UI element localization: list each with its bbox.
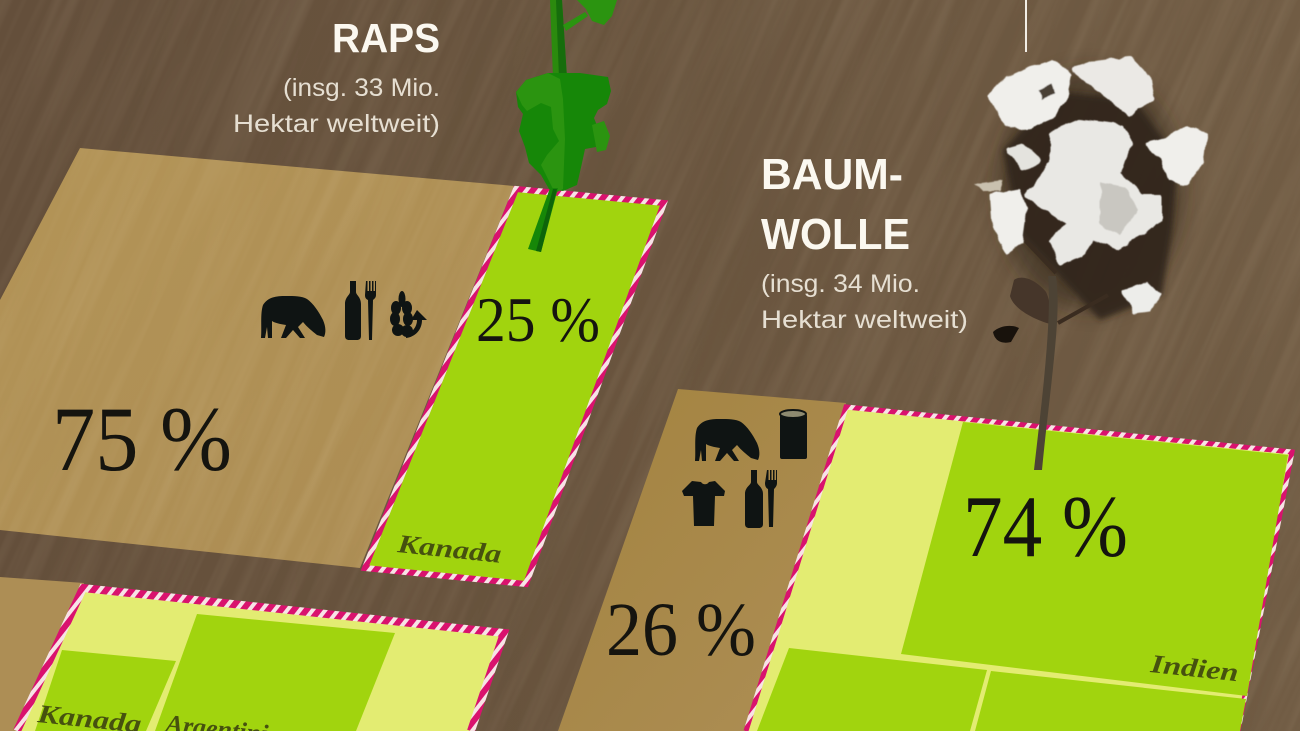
panel: Raps GM share Kanada bbox=[365, 189, 664, 584]
text: Baumwolle area: (insg. 34 Mio. bbox=[761, 270, 920, 298]
panel: Baumwolle conventional share bbox=[558, 389, 846, 731]
line: callout leader bbox=[1025, 0, 1027, 52]
panel: lower left conventional plot bbox=[0, 577, 84, 731]
area: lower country 1 bbox=[757, 648, 987, 731]
panel: Raps conventional share bbox=[0, 148, 514, 568]
icon: wheat and recycling arrow bbox=[390, 291, 427, 338]
text: Raps area: Hektar weltweit) bbox=[233, 110, 440, 138]
icon: cow bbox=[695, 419, 759, 461]
icon: cotton plant bbox=[974, 58, 1205, 470]
icon: t-shirt bbox=[682, 481, 725, 526]
heading: Raps: RAPS bbox=[332, 15, 440, 61]
heading: Baumwolle: BAUM- bbox=[761, 150, 903, 199]
text: Raps area: (insg. 33 Mio. bbox=[283, 74, 440, 102]
area: Kanada bbox=[35, 650, 176, 731]
percentage 75: 75 % bbox=[52, 388, 232, 490]
stem bbox=[1034, 276, 1058, 470]
label: Kanada: Kanada bbox=[395, 529, 503, 569]
label: Indien: Indien bbox=[1148, 649, 1240, 687]
icon: rapeseed plant bbox=[516, 0, 617, 252]
percentage 74: 74 % bbox=[963, 479, 1128, 576]
area: Indien bbox=[901, 422, 1288, 696]
panel: lower left GM plot bbox=[17, 588, 504, 731]
cotton bolls bbox=[974, 58, 1205, 312]
icon: can bbox=[780, 410, 807, 459]
heading: Baumwolle: WOLLE bbox=[761, 210, 910, 259]
leaf bbox=[1010, 278, 1051, 324]
icon: cow bbox=[261, 296, 325, 338]
area: Argentinien bbox=[155, 614, 395, 731]
icon: bottle bbox=[745, 470, 763, 528]
icon: oil bottle bbox=[345, 281, 361, 340]
icon: fork bbox=[765, 470, 777, 527]
percentage 26: 26 % bbox=[606, 588, 756, 672]
percentage 25: 25 % bbox=[476, 284, 600, 355]
text: Baumwolle area: Hektar weltweit) bbox=[761, 306, 968, 334]
panel: Baumwolle GM share bbox=[746, 407, 1292, 731]
icon: fork bbox=[365, 281, 376, 340]
area: lower country 2 bbox=[975, 671, 1246, 731]
